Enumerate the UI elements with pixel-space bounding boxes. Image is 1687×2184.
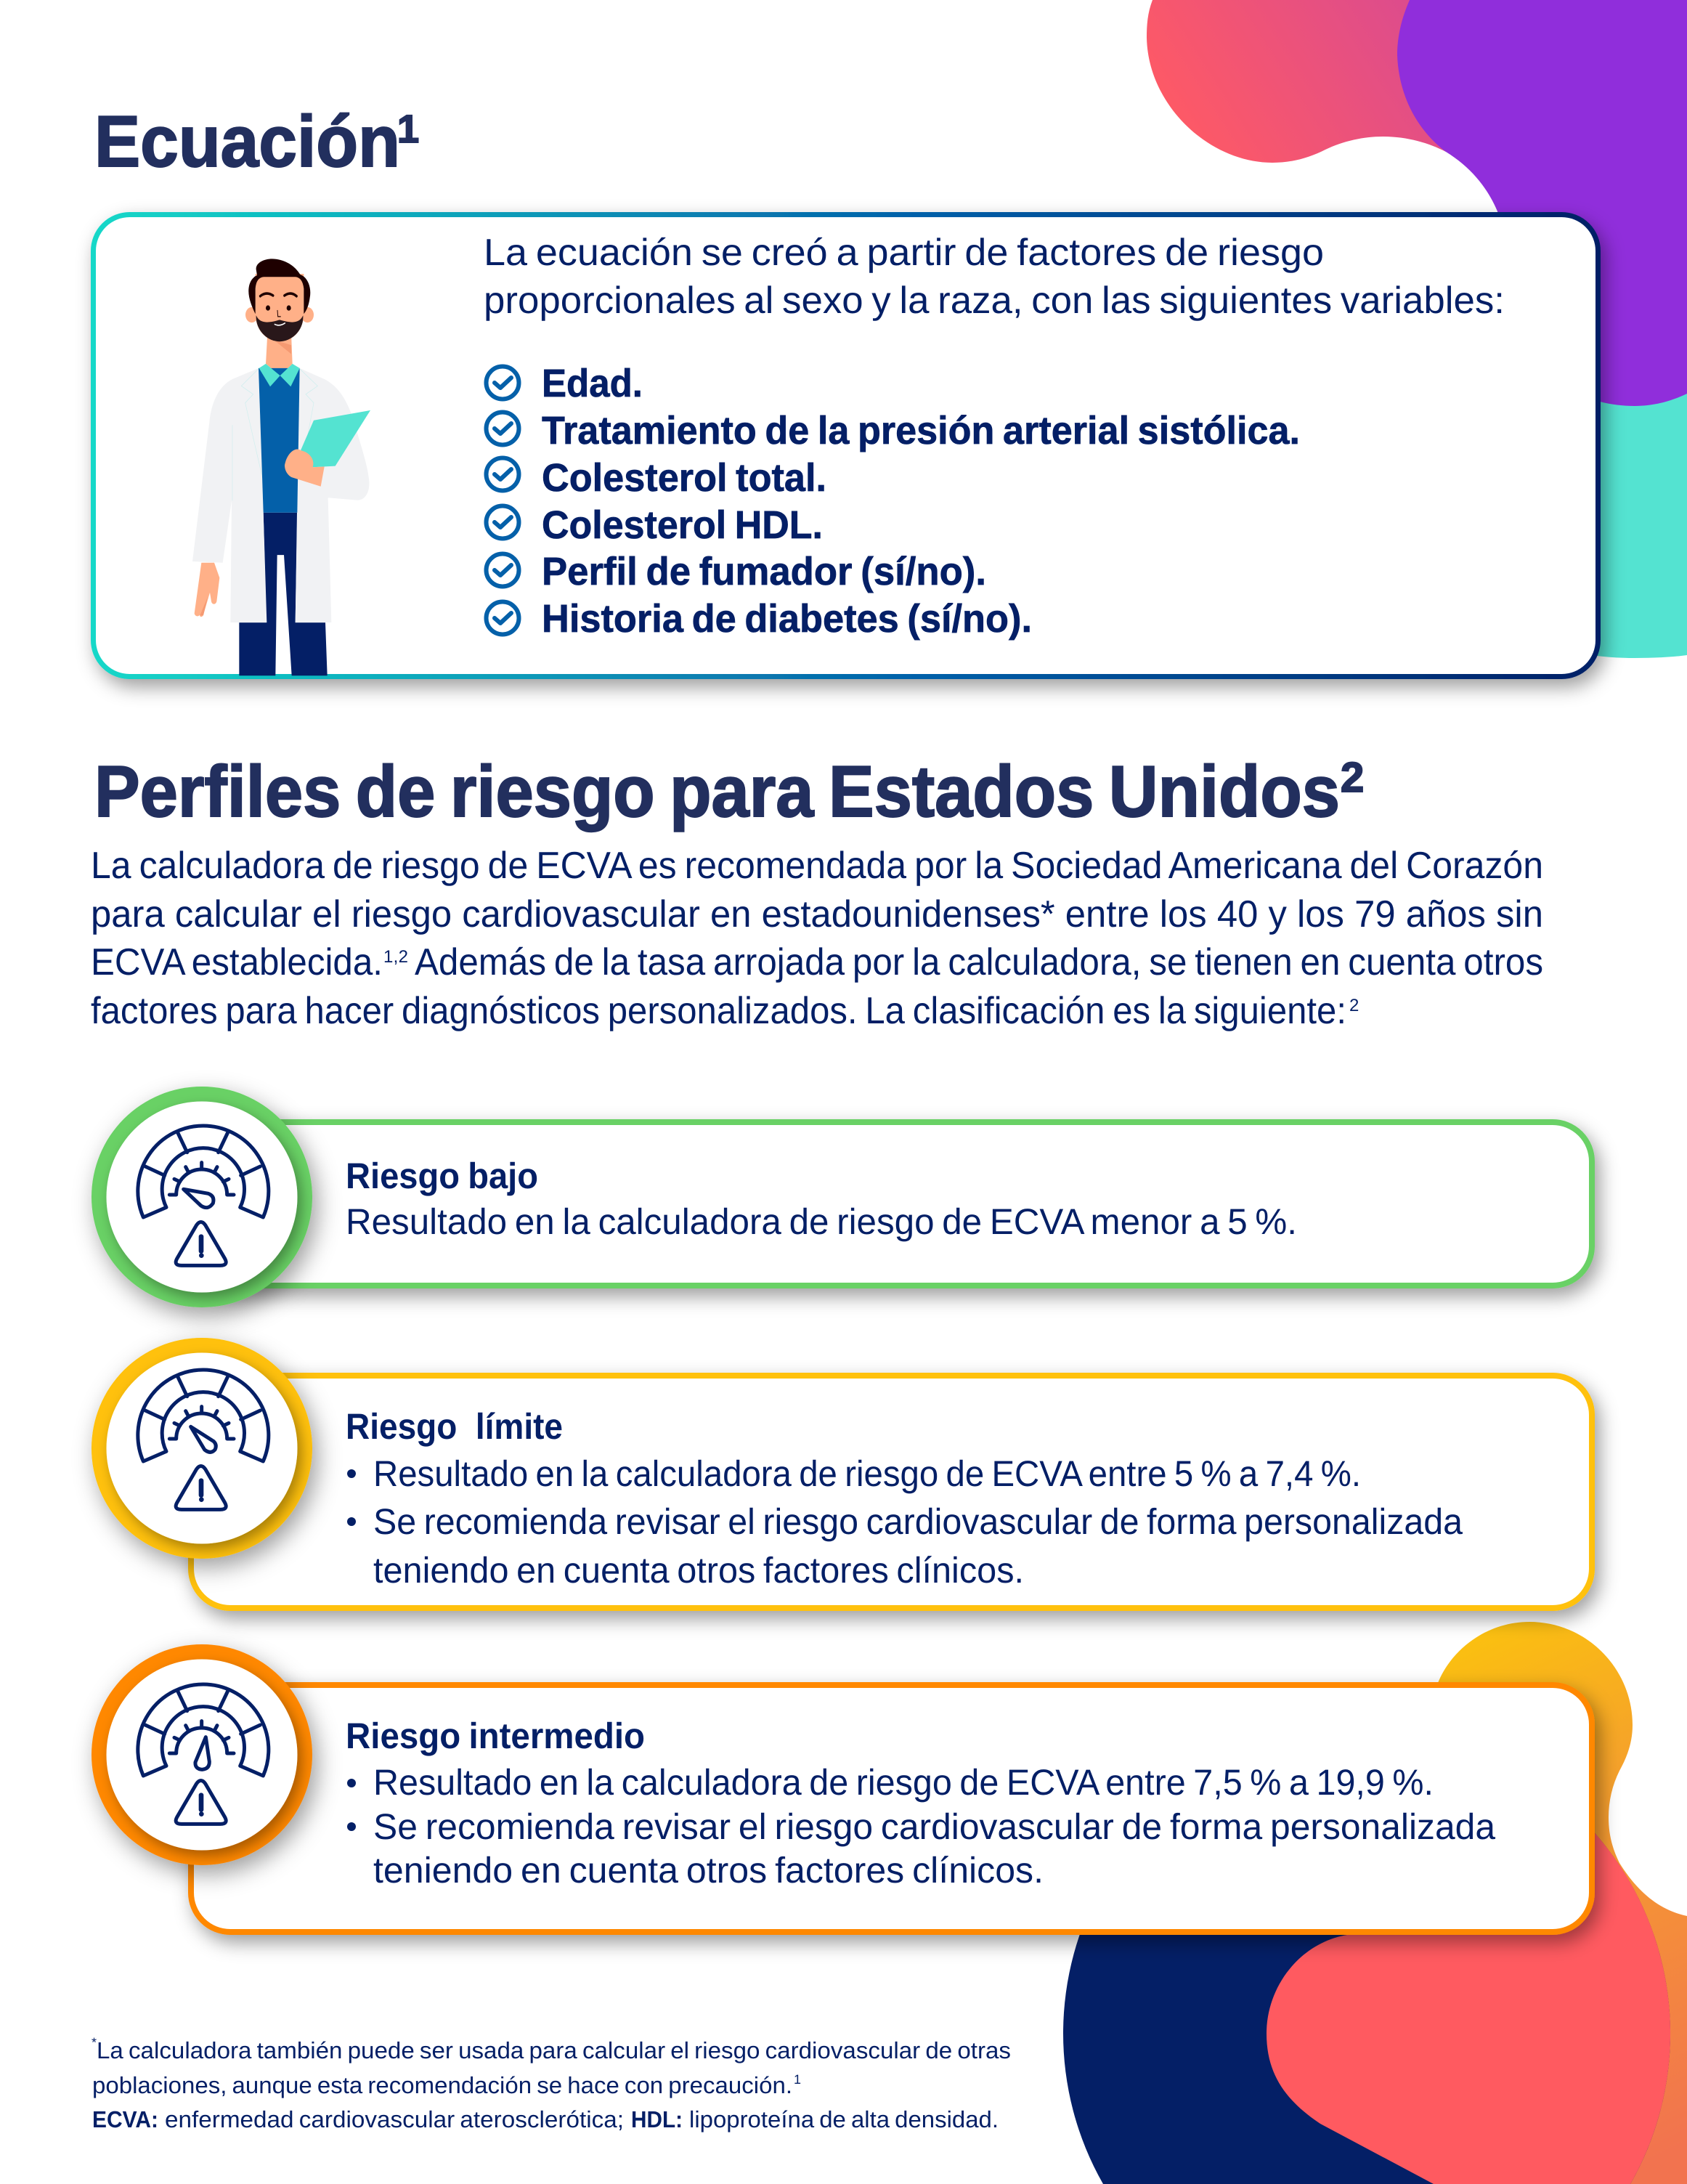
intro text [484, 232, 1505, 322]
check item: Edad: Edad. [542, 362, 643, 405]
heading: Perfiles de riesgo: Perfiles de riesgo para Estados Unidos [94, 751, 1340, 832]
icon circle [92, 1087, 312, 1307]
panel: equation [93, 215, 1598, 677]
card bullets: teniendo en cuenta otros factores clínicos. [373, 1550, 1024, 1591]
check item: Historia de diabetes: Historia de diabetes (sí/no). [542, 597, 1032, 641]
card bullets: Se recomienda revisar el riesgo cardiovascular de forma personalizada [373, 1806, 1495, 1847]
background blob: pink [1147, 0, 1525, 163]
background blob: orange [1438, 1622, 1687, 2184]
footnotes: 1 [794, 2072, 801, 2087]
card bullets: teniendo en cuenta otros factores clínicos. [373, 1850, 1044, 1891]
card bullets [347, 1453, 1463, 1591]
background blob: navy circle [1063, 1730, 1670, 2184]
heading: Ecuación: 1 [397, 107, 419, 151]
check list [487, 362, 1300, 641]
card bullets [347, 1762, 1495, 1891]
check item: Colesterol total: Colesterol total. [542, 456, 826, 500]
panel frame [93, 215, 1598, 677]
card bullets: Resultado en la calculadora de riesgo de ECVA entre 7,5 % a 19,9 %. [373, 1762, 1434, 1803]
footnotes: La calculadora también puede ser usada para calcular el riesgo cardiovascular de otras [97, 2037, 1011, 2063]
check item: Tratamiento: Tratamiento de la presión arterial sistólica. [542, 409, 1300, 452]
card title: Riesgo límite [346, 1406, 563, 1447]
intro paragraph: Además de la tasa arrojada por la calculadora, se tienen en cuenta otros [415, 941, 1543, 983]
intro paragraph: 1,2 [383, 947, 408, 967]
heading: Ecuación: Ecuación [94, 101, 400, 182]
card title: Riesgo intermedio [346, 1716, 645, 1756]
footnotes [92, 2035, 1011, 2132]
card bullets: Se recomienda revisar el riesgo cardiovascular de forma personalizada [373, 1501, 1463, 1542]
card frame [191, 1376, 1592, 1608]
heading: Perfiles de riesgo: 2 [1341, 754, 1364, 801]
footnotes: HDL: [631, 2106, 683, 2132]
card frame [190, 1122, 1592, 1286]
intro paragraph: 2 [1349, 996, 1359, 1015]
illustration: doctor [192, 259, 370, 675]
icon: gauge [138, 1370, 269, 1509]
card title: Riesgo bajo [346, 1156, 538, 1196]
panel: riesgo intermedio [92, 1644, 1592, 1932]
footnotes: enfermedad cardiovascular aterosclerótica; [165, 2106, 624, 2132]
intro paragraph [91, 845, 1543, 1032]
background blob: purple [1397, 0, 1687, 406]
background blob: teal [1525, 363, 1687, 658]
footnotes: * [92, 2035, 97, 2050]
check item: Edad [487, 362, 643, 405]
intro text: proporcionales al sexo y la raza, con las siguientes variables: [484, 280, 1505, 322]
icon circle [92, 1644, 312, 1865]
background blob: coral [1267, 1774, 1670, 2184]
card text: Resultado en la calculadora de riesgo de ECVA menor a 5 %. [346, 1201, 1297, 1242]
panel: riesgo bajo [92, 1087, 1592, 1307]
icon circle [92, 1338, 312, 1559]
panel: riesgo limite [92, 1338, 1592, 1608]
intro paragraph: factores para hacer diagnósticos personalizados. La clasificación es la siguiente: [91, 990, 1346, 1032]
intro paragraph: ECVA establecida. [91, 941, 383, 983]
intro text: La ecuación se creó a partir de factores de riesgo [484, 232, 1324, 274]
icon: gauge [138, 1126, 269, 1265]
card frame [191, 1685, 1592, 1932]
intro paragraph: para calcular el riesgo cardiovascular en estadounidenses* entre los 40 y los 79 años sin [91, 893, 1543, 935]
footnotes: poblaciones, aunque esta recomendación se hace con precaución. [92, 2072, 792, 2098]
card bullets: Resultado en la calculadora de riesgo de ECVA entre 5 % a 7,4 %. [373, 1453, 1361, 1494]
intro paragraph: La calculadora de riesgo de ECVA es recomendada por la Sociedad Americana del Corazón [91, 845, 1543, 887]
check item: Colesterol HDL: Colesterol HDL. [542, 503, 823, 547]
footnotes: ECVA: [92, 2106, 158, 2132]
icon: gauge [138, 1684, 269, 1824]
check item: Perfil de fumador: Perfil de fumador (sí/no). [542, 550, 986, 593]
footnotes: lipoproteína de alta densidad. [689, 2106, 999, 2132]
